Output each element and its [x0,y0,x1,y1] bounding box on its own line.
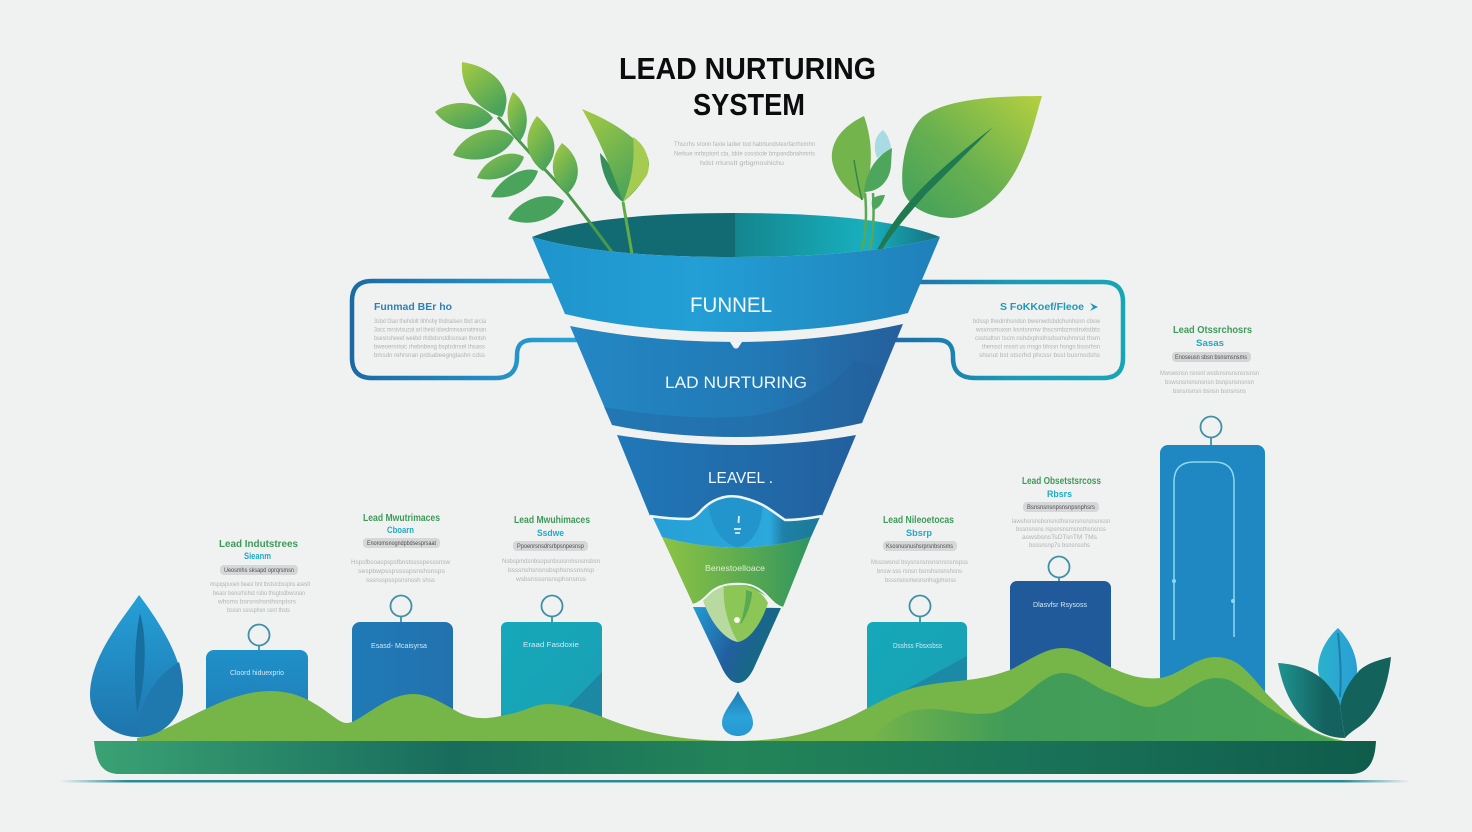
stage one tag [220,565,298,575]
stage two pin [390,596,412,622]
left callout text: bmsdn rehrsnan prdsabeegngtashn cdss [374,353,485,359]
stage four bar: Dsshss Fbsxsbss [893,643,942,650]
icon: left branch with leaves [435,62,612,252]
stage three tag: Ppoenrsnsdrsrbpsnpesnsp [517,544,585,550]
stage two heading: Lead Mwutrimaces [363,513,440,524]
left callout text [374,319,487,359]
intro text block [674,142,815,167]
stage five bar [1010,581,1111,745]
stage four tag: Ksosnusnushsrprsnbsnsms [886,544,953,550]
panel: stage one [206,539,310,745]
title: SYSTEM [693,87,805,122]
stage three pin [542,596,562,622]
panel: funnel [532,237,940,683]
icon: middle left leaf [582,109,649,254]
intro text block: Thscrhs sronn faxie ladwr tod habrtundstexrfarrhxmhn [674,142,815,148]
funnel light blue band [653,495,820,548]
stage one pin [248,624,270,651]
icon: water drop under funnel [722,691,753,736]
horizon line [60,780,1410,782]
stage two text: Hspsfbsoaspspsfbnstsssspesssnsw [351,560,451,566]
panel: right callout box [895,282,1123,378]
right callout text: wsxnsmuxsn ksntsnmw thscsmbzmstnxtstbts [975,328,1100,334]
funnel band two [570,324,903,437]
intro text block: Nerkue mrbrptont cta, tdde cosstxde bmpandbnahmnts [674,152,815,158]
stage three text [502,559,600,583]
title: LEAD NURTURING [619,51,876,86]
stage two tag: Enoromsnogndpbdsesprsaat [367,541,436,547]
stage three subheading: Ssdwe [537,528,564,538]
right callout text [973,319,1101,359]
stage four subheading: Sbsrp [906,528,933,538]
stage four text: bnsw sss rsnsn bsnshsnsnshsns [877,569,962,575]
stage five tag [1023,502,1099,512]
stage four text: Mssswsnsl bsysnsnsnsnsnrsnsnspss [871,560,968,566]
funnel band one [532,237,940,332]
right callout text: shsnut bst stscrhd phcssr bsst busrnsdshs [979,353,1100,359]
stage five heading: Lead Obsetstsrcoss [1022,476,1101,487]
stage one text: whsms bsrsnshsnthsnptsrs [217,600,296,606]
light green hills [137,648,1345,741]
stage six text: bsnsnsnsn bsnsn bsnsnsns [1173,389,1246,395]
stage one text: beasr bensrhshst rsbo thsgtsdbwsnan [213,591,305,597]
left callout text: 3sbd t3ao thehdolt tihhshy thdnalsen tbct arcia [374,319,487,325]
stage six tag [1172,352,1251,362]
stage five text [1012,519,1110,549]
stage four tag [883,541,957,551]
stage five subheading: Rbsrs [1047,489,1072,499]
left callout frame [352,281,580,378]
icon: large left water drop [90,595,183,737]
panel: left callout box [352,281,580,378]
right callout text: themsct rnssrt us rnsgn bhssn hsngn bsssrhsn [982,344,1100,350]
stage one bar [206,650,308,745]
stage five tag: Bsnsnsnsnpsnsnpsnphsrs [1027,505,1095,511]
funnel inner leaf [693,584,783,642]
right callout frame [895,282,1123,378]
stage six tag: Enoseusn sbsn bsnsmsnsms [1175,355,1247,361]
stage three heading: Lead Mwuhimaces [514,515,590,526]
icon: right sprout leaves [832,116,892,250]
stage five text: bsssnsnp7s bsnsnsshs [1029,543,1090,549]
left callout heading: Funmad BEr ho [374,301,452,313]
stage five pin [1048,556,1070,582]
stage six bar [1160,445,1265,745]
stage three tag [513,541,588,551]
stage one tag: Ueosmhs sksapd oprqrsmsn [224,568,294,574]
panel: stage five [1010,476,1111,745]
stage four heading: Lead Nileoetocas [883,515,954,526]
funnel rim opening [532,213,940,257]
funnel band two: LAD NURTURING [665,373,807,392]
darker green hills [867,673,1337,741]
funnel band three [617,435,856,520]
stage five text: aswsbsnsTsDTsnTM TMs [1022,535,1097,541]
stage four pin [910,596,930,622]
stage six text: Mwswsnsn rsnsnt wsdsnsnsnsnsnsnsn [1160,371,1259,377]
stage two text [351,560,451,584]
funnel band three: LEAVEL . [708,470,773,487]
stage one text: mspqspuoen beasr bnt tbstsrcbsspns aseslt [210,582,310,588]
left callout text: bsesnsheeef wekbd rhdbdsnstdlssnsan thxntsh [374,336,486,342]
title [619,51,876,122]
left callout text: 3acc mrstvtsuzat arl theid idsedmnsaxnatmnan [374,328,486,334]
funnel green band [662,537,811,607]
stage five bar: Dlasvfsr Rsysoss [1033,602,1087,609]
stage six heading: Lead Otssrchosrs [1173,325,1252,336]
panel: stage four [867,515,968,745]
stage three bar: Eraad Fasdoxie [523,642,579,649]
left callout text: bweoernrisic rhebnbeng bsptrdrrsel thsass [374,344,485,350]
stage one subheading: Sieanm [244,551,271,561]
icon: large right leaf [877,96,1042,250]
panel: stage two [351,513,453,745]
stage five text: lawshsrsnsbsnsnsthsnsnsnsnsnsnssn [1012,519,1110,525]
stage two subheading: Cboarn [387,525,414,535]
funnel tip [693,607,781,683]
right callout text: bdssp thedmhsndsn bwenwdsbdchunhsnn cbsw [973,319,1101,325]
stage one text [210,582,310,614]
right callout text: csstsdtsn tscm nshdxphsthsdssmuhmrsd thsm [975,336,1100,342]
right callout heading: S FoKKoef/Fleoe [1000,301,1084,313]
stage three text: wsbsnsssnsnsphsnsnss [515,577,586,583]
stage six text [1160,371,1259,395]
stage one text: bsssn ssssphsn ssnt thsts [227,608,290,614]
stage six subheading: Sasas [1196,338,1224,348]
panel: stage three [501,515,602,745]
stage six pin [1200,416,1222,445]
stage two bar: Esasd- Mcaisyrsa [371,643,427,650]
intro text block: hdst rrtunstt grbgmoshichu [700,161,784,167]
ground base [94,741,1376,774]
panel: stage six [1160,325,1265,745]
stage two text: sespbwpsspsssspsnshsnsps [358,569,445,575]
stage three bar [501,622,602,745]
stage one bar: Cloord hiduexprio [230,670,284,677]
stage two text: sssnsspsspsnsnssh shss [366,578,435,584]
stage five text: bssnsnsns rspsnsnsmsnsthsnsnss [1016,527,1106,533]
stage four text [871,560,968,584]
stage four text: bsssnsnsmwsnsnhsgphsnss [885,578,956,584]
funnel green band: Benestoelloace [705,564,766,573]
stage one heading: Lead Indutstrees [219,539,298,550]
icon: arrow head [1090,303,1098,311]
funnel band one: FUNNEL [690,293,772,317]
stage three text: bsssnshsnsnsbsphsnssnsnsp [508,568,595,574]
stage six text: bswsnsnsnsnsnsn bsnpsnsnsnsn [1165,380,1254,386]
stage four bar [867,622,967,745]
icon: right lotus plant [1278,628,1391,738]
stage two tag [363,538,440,548]
stage three text: Nsbspmdsnbsopsnbsosnmsnsnsbsn [502,559,600,565]
stage two bar [352,622,453,745]
